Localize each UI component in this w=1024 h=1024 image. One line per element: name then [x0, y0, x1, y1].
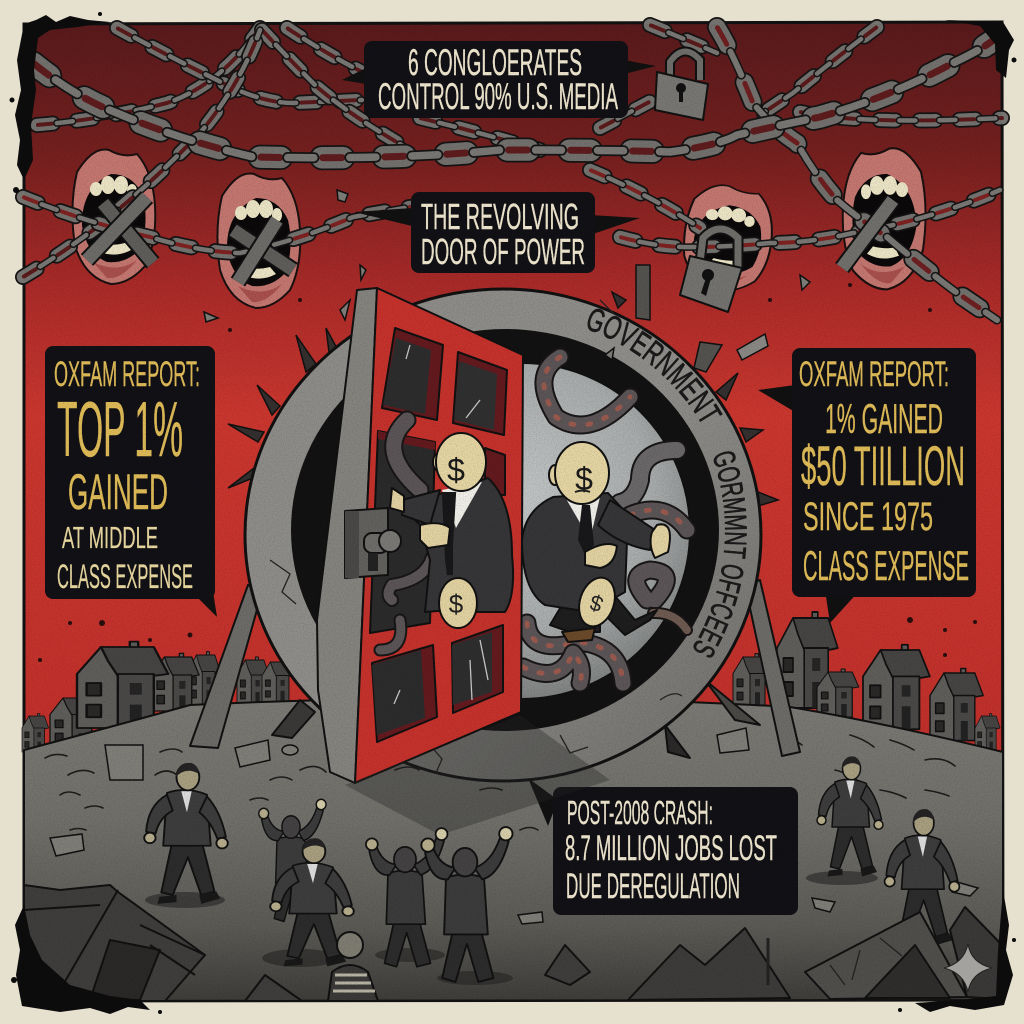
vault: government offices ring: GORMMNT OFFCEES — [694, 451, 747, 658]
man on door with dollar face — [390, 433, 513, 628]
curved label: offices — [688, 455, 725, 655]
callout: right Oxfam report: SINCE 1975 — [803, 495, 933, 539]
survivor right 1 — [817, 756, 883, 876]
icon: sparkle watermark — [944, 944, 992, 992]
survivor 4 arms up — [366, 828, 448, 967]
door face — [355, 288, 523, 783]
rubble bottom left — [24, 885, 205, 1001]
callout: left Oxfam report: AT MIDDLE — [62, 520, 158, 555]
icon: mouth left — [217, 173, 300, 308]
ruined houses right — [733, 612, 1000, 752]
icon: mouth far left — [72, 149, 155, 284]
tentacles on door — [380, 420, 432, 650]
callout: left Oxfam report: CLASS EXPENSE — [57, 558, 193, 596]
inverted head on vault man — [573, 573, 621, 631]
door window 3 — [370, 431, 505, 633]
door window 2 — [453, 352, 507, 435]
dirt around feet — [145, 871, 878, 985]
callout: left Oxfam report — [45, 346, 217, 617]
chains across the sky — [37, 25, 1002, 150]
planks gagging mouth left — [233, 220, 293, 282]
survivor right 2 — [885, 809, 959, 945]
vault: government offices ring — [244, 288, 762, 782]
inverted head on door man: $ — [449, 589, 464, 619]
callout: post-2008 crash: DUE DEREGULATION — [566, 867, 740, 906]
tentacles in vault — [523, 357, 687, 683]
icon: padlock lower — [680, 229, 742, 312]
curved label: government — [584, 328, 704, 428]
door: open vault door — [317, 288, 523, 783]
callout: conglomerates: 6 CONGLOERATES — [408, 42, 582, 83]
survivor 3 running — [270, 838, 354, 966]
callout: conglomerates — [342, 41, 656, 118]
door handle — [345, 508, 401, 578]
door window 1 — [382, 328, 443, 420]
survivor suit man 1 — [144, 763, 228, 904]
callout: revolving door: THE REVOLVING — [421, 196, 579, 237]
sky specks — [38, 283, 977, 662]
callout: left Oxfam report: GAINED — [68, 464, 168, 520]
callout: right Oxfam report — [758, 348, 976, 623]
lower and diagonal chains — [23, 27, 1000, 320]
inverted head on vault man: $ — [587, 590, 606, 617]
door window 5 — [452, 625, 503, 713]
door shadow — [345, 715, 610, 835]
vault: government offices ring: GOVERNMENT — [588, 308, 723, 422]
survivor 2 — [259, 799, 326, 922]
spikes on vault rim — [228, 265, 778, 506]
ruined houses left — [22, 642, 294, 752]
skeleton survivor — [328, 932, 378, 1001]
door edge — [317, 288, 377, 783]
inverted head on door man — [439, 578, 477, 628]
icon: padlock top — [655, 51, 708, 120]
survivor 5 arms up — [421, 827, 512, 982]
dark inner ring — [291, 329, 719, 731]
callout: revolving door — [354, 192, 640, 273]
callout: post-2008 crash — [528, 778, 798, 915]
man on door with dollar face: $ — [447, 452, 465, 488]
man in vault with dollar face — [522, 442, 670, 642]
rubble bottom right — [805, 907, 1002, 999]
ground hill — [24, 698, 1003, 1001]
callout: post-2008 crash: POST-2008 CRASH: — [567, 794, 713, 831]
flying rubble — [50, 190, 978, 924]
vault support struts — [190, 580, 800, 758]
door window 4 — [372, 645, 437, 742]
rubble bottom centre — [245, 928, 790, 1001]
icon: mouth right — [677, 181, 778, 297]
ground cracks — [45, 735, 955, 830]
planks gagging mouth far left — [87, 197, 153, 263]
icon: mouth far right — [843, 148, 926, 289]
callout: left Oxfam report: TOP 1% — [57, 385, 183, 473]
callout: revolving door: DOOR OF POWER — [421, 231, 585, 272]
callout: post-2008 crash: 8.7 MILLION JOBS LOST — [565, 829, 777, 868]
man in vault with dollar face: $ — [575, 461, 593, 497]
plank gagging mouth far right — [842, 200, 893, 268]
callout: left Oxfam report: OXFAM REPORT: — [54, 355, 200, 394]
vault interior — [354, 363, 690, 699]
callout: conglomerates: CONTROL 90% U.S. MEDIA — [378, 76, 618, 117]
